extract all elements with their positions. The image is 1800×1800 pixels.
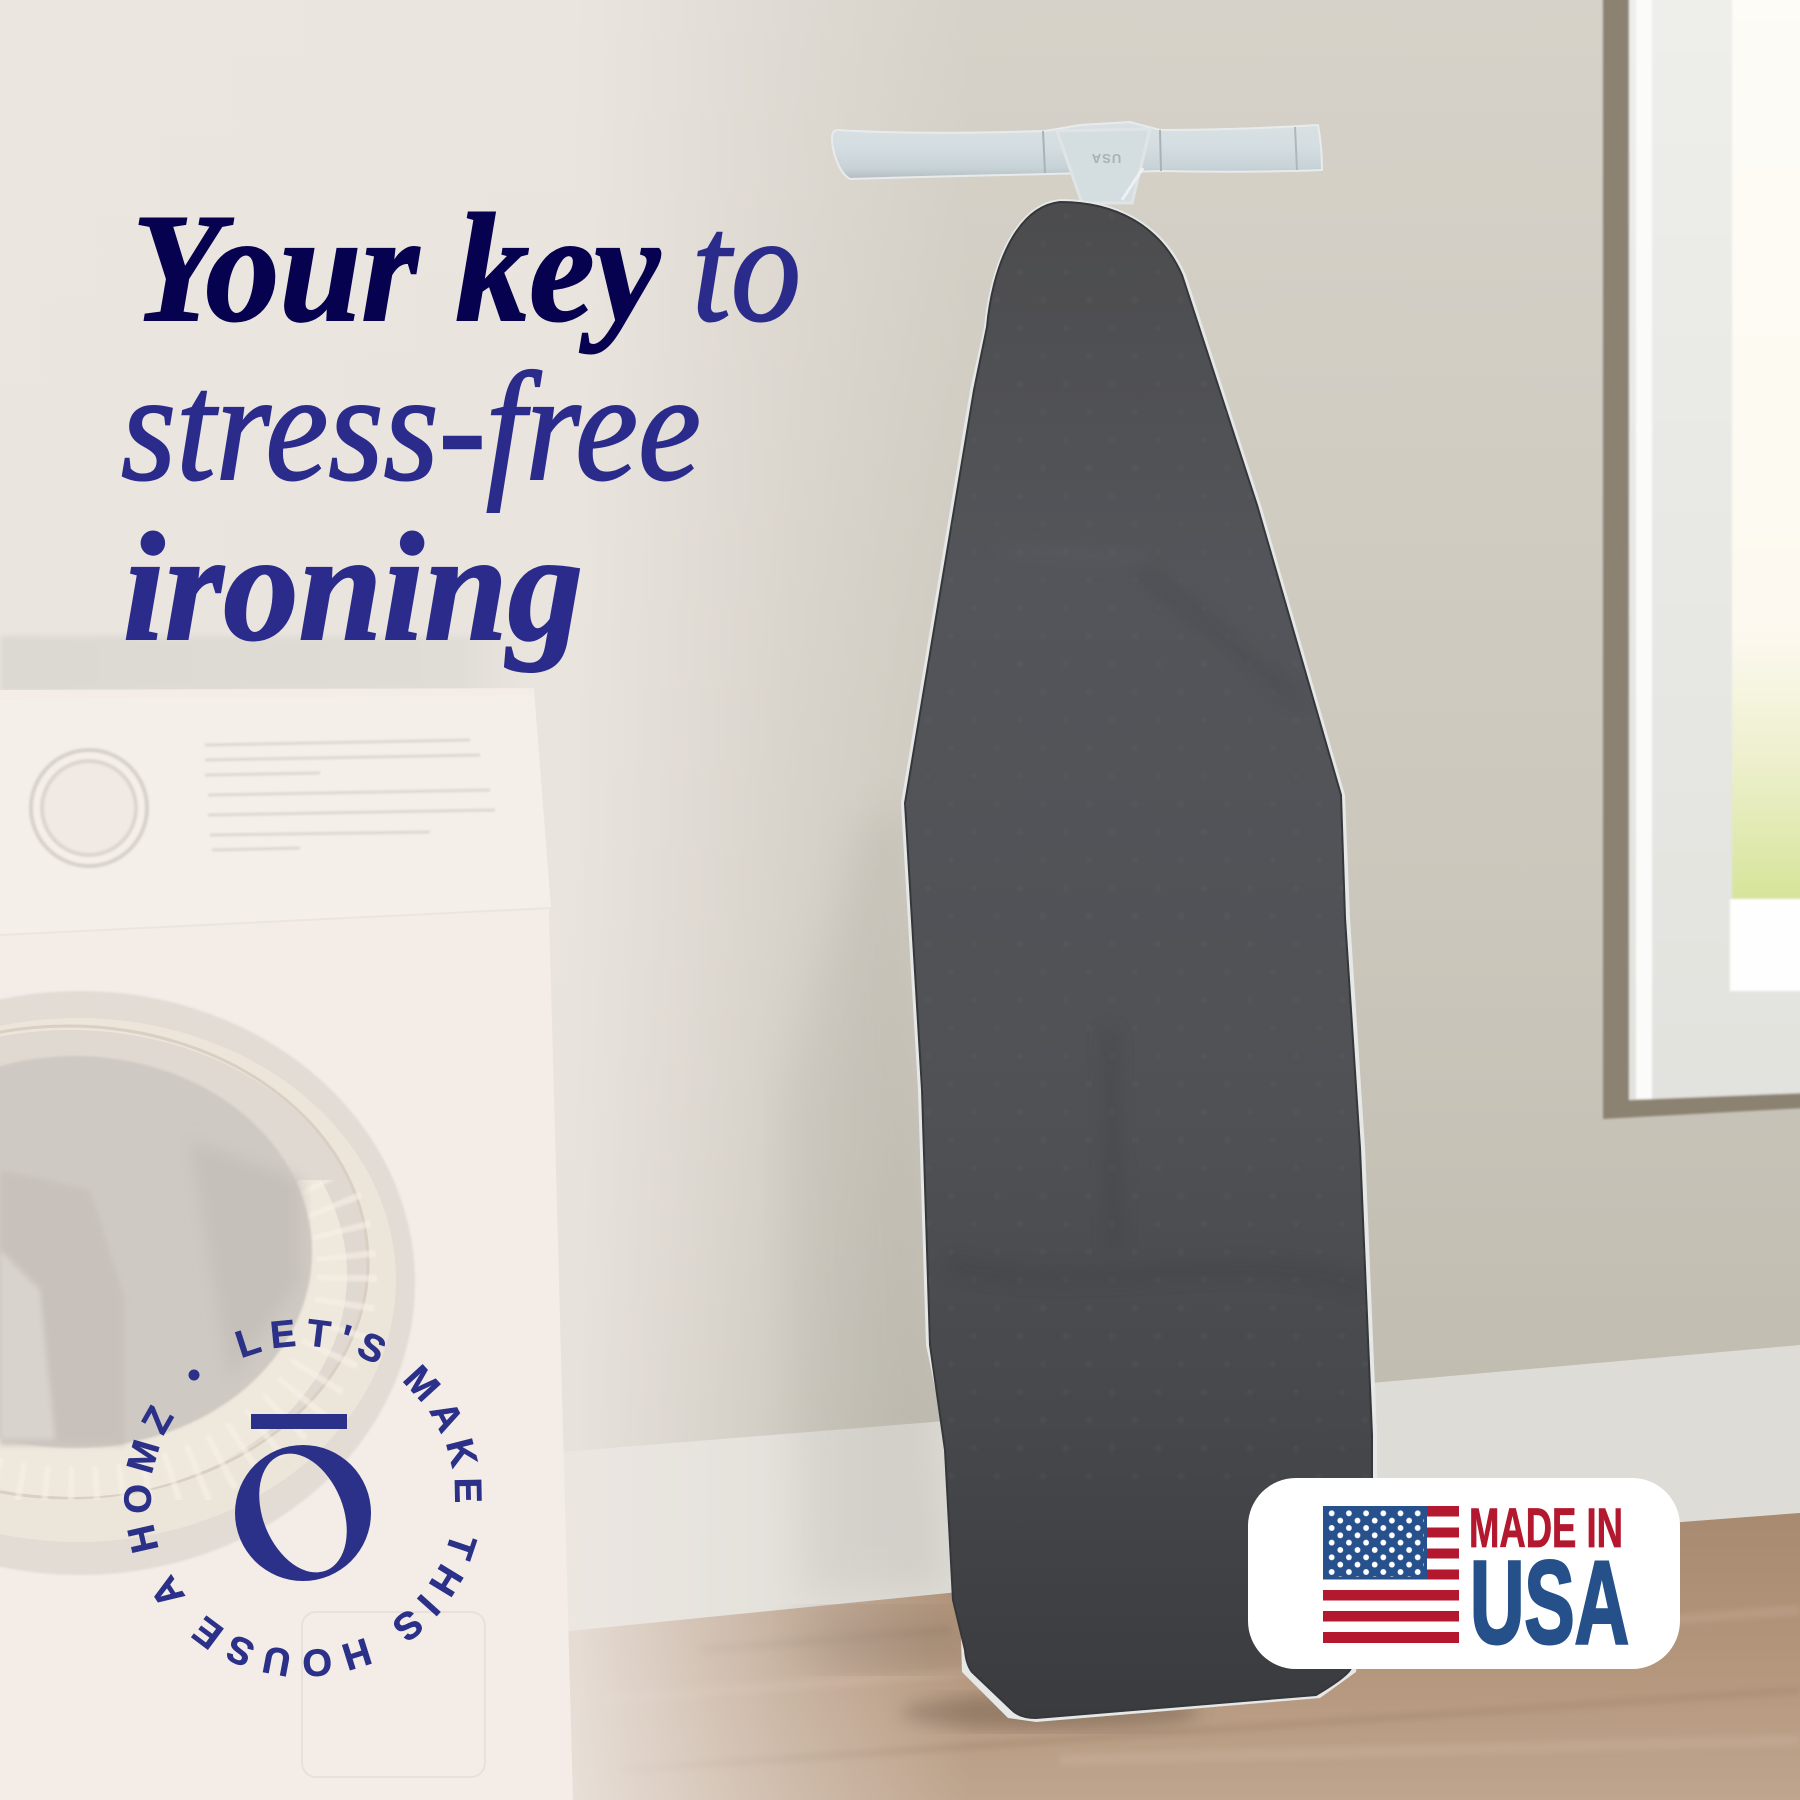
- headline line 1: to: to: [692, 182, 801, 354]
- background: board shadow on wall: [780, 803, 945, 1600]
- badge: USA: USA: [1470, 1537, 1629, 1669]
- badge: US flag: [1323, 1506, 1459, 1643]
- seal: logo ring: [235, 1445, 371, 1581]
- board: white underside edge: [901, 199, 1377, 1722]
- washer: door glass: [0, 1056, 312, 1448]
- board: handle bar: [832, 122, 1322, 203]
- ironing board: [832, 122, 1380, 1722]
- headline line 2: stress-free: [121, 341, 701, 513]
- made in USA badge: [1248, 1478, 1680, 1669]
- washer: lower panel outline: [302, 1612, 485, 1777]
- washer: body: [0, 688, 573, 1800]
- board: dark cover: [905, 202, 1372, 1718]
- washer: control knob: [31, 750, 147, 866]
- seal: dot separator: [188, 1370, 200, 1380]
- washer: door: [0, 991, 415, 1575]
- washing machine: [0, 636, 573, 1800]
- washer: shelf shadow band: [0, 636, 540, 692]
- brand seal: [124, 1318, 482, 1677]
- headline line 1: Your key: Your key: [132, 182, 661, 354]
- board: embossed USA mark: USA: [1091, 151, 1121, 166]
- badge: MADE IN: MADE IN: [1469, 1496, 1623, 1559]
- seal: logo bar: [251, 1414, 347, 1429]
- badge: white pill: [1248, 1478, 1680, 1669]
- washer: control panel: [0, 695, 551, 935]
- window frame: [1603, 0, 1800, 1119]
- background: baseboard: [560, 1345, 1800, 1632]
- headline line 3: ironing: [123, 501, 583, 673]
- seal: circular tagline: LET'S MAKE THIS HOUSE A HOMZ: [124, 1318, 482, 1677]
- background: wood floor: [560, 1513, 1800, 1800]
- headline: [121, 182, 801, 673]
